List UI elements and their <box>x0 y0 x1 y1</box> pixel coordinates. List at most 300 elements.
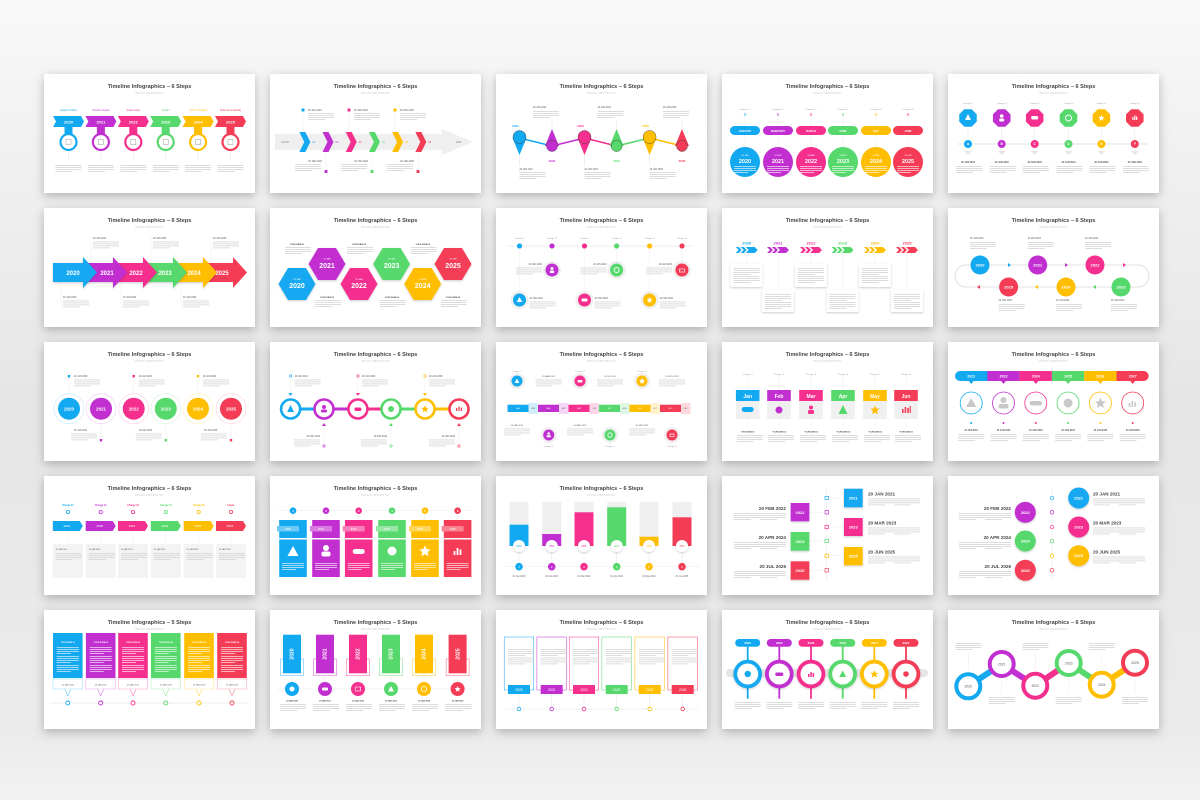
Jan: Change #1 <box>743 374 753 376</box>
step E: Change #5 <box>1097 103 1107 105</box>
slide 15: year bar with outlined circles: Timeline Infographics – 6 Steps <box>1012 352 1095 358</box>
bar 2023 <box>379 635 405 711</box>
date notes: 20 JAN 2021 <box>93 237 107 240</box>
April: 2023 <box>837 159 849 165</box>
chevron 05 <box>392 132 409 152</box>
node 2024 <box>1089 643 1115 697</box>
step 2023: 20 JAN 2022 <box>997 429 1011 432</box>
hex 2022: YOUR DATA 03 <box>352 243 367 246</box>
card 1: YOUR DATA 01 <box>61 641 76 644</box>
step 6: Change #6 <box>677 238 688 240</box>
chevron 06: 06 <box>428 140 432 144</box>
step B: B <box>1001 142 1004 146</box>
arrow 2020 <box>53 257 97 288</box>
hex 2021: 13 JAN <box>323 258 331 260</box>
step 2026: 2026 <box>1096 374 1104 378</box>
node 2025 <box>1122 651 1148 704</box>
hex 2023: 28 JAN <box>388 258 396 260</box>
circle 2021: 2021 <box>1033 263 1043 268</box>
slide 1: chevron years with circles: Timeline Infographics – 6 Steps <box>108 84 191 90</box>
bar 2020: 20 JAN 2020 <box>286 700 299 702</box>
node 2024: 2024 <box>1098 683 1106 687</box>
bar 2020: 2020 <box>290 648 296 660</box>
step F: F <box>1134 142 1136 146</box>
March <box>796 109 826 177</box>
Feb: Feb <box>775 394 783 400</box>
ring 6 <box>429 400 468 447</box>
slide 3: zigzag pins <box>496 74 707 193</box>
slide 12: ring chain with icons: Timeline Infographics – 6 Steps <box>334 352 417 358</box>
ring 2023 <box>797 639 825 709</box>
step 2027: 20 JAN 2026 <box>1126 429 1140 432</box>
ring 2023: 2023 <box>808 641 815 645</box>
arrow 2023 <box>144 257 187 288</box>
chevron 05: 05 <box>405 140 409 144</box>
slide 2: start/end arrow band <box>270 74 481 193</box>
connecting bars <box>291 408 459 410</box>
pin 2021: 2021 <box>512 124 519 128</box>
bar 2024: 20 JAN 2024 <box>418 700 431 702</box>
chevron 04: 04 <box>382 140 385 144</box>
month bar: NOV <box>668 408 673 410</box>
card 4: 20 JAN 2023 <box>160 683 173 686</box>
June: 2025 <box>902 159 914 165</box>
Apr: YOUR DATA 04 <box>836 430 851 434</box>
node 2022 <box>1022 643 1048 698</box>
month bar: SEP <box>638 408 643 410</box>
ring 5: 20 JAN 2025 <box>429 375 443 378</box>
bottom dates: 20 JAN 2022 <box>308 160 323 163</box>
step 2023: 2023 <box>194 524 201 528</box>
slide 14: month boxes with icons <box>722 342 933 461</box>
bottom dates: 20 JAN 2026 <box>400 160 415 163</box>
step 2021 <box>85 109 116 172</box>
bar 75% <box>672 502 692 578</box>
hex 2023: 2023 <box>384 263 399 270</box>
Feb: YOUR DATA 02 <box>772 430 786 434</box>
month bar: JUN <box>592 408 597 410</box>
Mar: Change #3 <box>806 374 817 376</box>
April <box>828 109 858 177</box>
entry 2026 <box>734 561 828 580</box>
step 2022 <box>958 374 984 441</box>
bar 2025: 20 JAN 2025 <box>452 700 464 702</box>
bar 25%: 2 <box>551 565 553 569</box>
step 3 <box>576 238 620 309</box>
step 2022 <box>795 240 827 287</box>
circle 2022: 2022 <box>129 406 139 412</box>
step 2020: 2020 <box>96 524 103 528</box>
May: May <box>870 394 880 400</box>
slide 17: numbered colored columns with icons: Enter your subhead line here <box>361 494 390 496</box>
slide 21: colored cards with date callouts: Enter your subhead line here <box>135 628 164 630</box>
May: MAY <box>873 129 879 133</box>
slide 13: monthly bar <box>496 342 707 461</box>
circle 2022: 20 JAN 2022 <box>1085 237 1099 240</box>
gray band arrow <box>275 129 473 155</box>
month bar: MAR <box>546 407 551 410</box>
slide 5: octagons with letters: Timeline Infographics – 6 Steps <box>1012 84 1095 90</box>
pin 2023 <box>577 124 610 179</box>
step 2021: Prioritize Criteria <box>92 109 110 112</box>
circle 2024: 20 JAN 2024 <box>1056 299 1070 302</box>
March: 20 MAR <box>807 154 815 157</box>
entry 2024: 20 APR 2024 <box>759 535 786 540</box>
step 5: 20 JAN 2025 <box>660 297 674 300</box>
arrows <box>977 263 1126 289</box>
chevron 02 <box>322 132 339 152</box>
node 2021: 2021 <box>998 662 1006 666</box>
step 2022: 20 JAN 2022 <box>154 548 166 551</box>
slide 7: hexagons <box>270 208 481 327</box>
bar 20%: 20% <box>646 544 652 548</box>
ring 2024 c <box>892 639 920 709</box>
box 2024 <box>635 637 665 711</box>
step B: 20 JAN 2022 <box>995 161 1009 164</box>
step 2021: 2021 <box>96 119 106 124</box>
ring 2024 b: 2024 <box>871 641 878 645</box>
step 2022: 20 JAN 2021 <box>964 429 979 432</box>
node 2022: 2022 <box>1032 684 1039 688</box>
box 2020 <box>504 637 534 711</box>
bar 50% <box>510 502 528 578</box>
bottom markers: Change #4 <box>605 446 615 448</box>
slide 11: circles with rings <box>44 342 255 461</box>
Mar: Mar <box>807 394 815 400</box>
step 2022: 2022 <box>807 240 816 246</box>
top dates <box>302 108 426 132</box>
circle 2023: 2023 <box>161 406 171 412</box>
January: 20 JAN <box>742 154 749 157</box>
pin 2023: 20 JAN 2023 <box>584 168 599 171</box>
entry 2022 <box>734 503 828 521</box>
date notes: 20 JAN 2023 <box>153 237 167 240</box>
slide 11: circles with rings: Enter your subhead line here <box>135 360 164 362</box>
Mar: YOUR DATA 03 <box>804 430 818 434</box>
June: 20 JUN <box>905 155 912 157</box>
step 2020: Change #2 <box>95 505 107 507</box>
slide 18: percentage bar chart: Enter your subhead line here <box>587 494 616 496</box>
ring 6: 20 JAN 2024 <box>442 435 456 438</box>
hex 2024: 20 JAN <box>419 278 427 281</box>
month bar: JAN <box>516 407 520 410</box>
step D: D <box>1067 142 1070 146</box>
step 1: Change #1 <box>515 238 525 240</box>
step A: 20 JAN 2021 <box>961 161 976 164</box>
chevron 04 <box>369 132 385 152</box>
May: YOUR DATA 05 <box>868 430 882 434</box>
Apr: Apr <box>839 394 847 400</box>
Jun <box>894 374 921 442</box>
card 5: 20 JAN 2024 <box>193 683 206 686</box>
pin 2026: 20 JAN 2026 <box>663 106 677 109</box>
entry 2024 <box>734 532 828 551</box>
slide 16: arrow tabs with gray boxes: Enter your subhead line here <box>135 494 164 496</box>
step 2023: 20 JAN 2023 <box>187 548 199 551</box>
step 2026 <box>1087 374 1113 441</box>
top markers: 20 JAN 2021 <box>511 424 524 427</box>
step 2025: 2025 <box>226 119 236 124</box>
step 2023 <box>990 374 1016 441</box>
slide 19: vertical timeline with squares <box>722 476 933 595</box>
bottom markers <box>536 375 685 448</box>
circle 2020 <box>970 237 996 274</box>
card 3 <box>118 633 148 705</box>
hex 2025: 2025 <box>445 263 461 270</box>
top markers <box>504 371 655 435</box>
slide 22: vertical year bars with icons: Enter your subhead line here <box>361 628 390 630</box>
step 2023: Factors <box>162 109 170 112</box>
step 2: 20 JAN 2020 <box>529 263 543 266</box>
circle 2024 <box>183 375 229 424</box>
bar 90%: 4 <box>616 565 618 569</box>
arrow 2024 <box>174 257 217 288</box>
bar 25% <box>542 502 561 578</box>
June: JUNE <box>905 129 912 133</box>
slide 14: month boxes with icons: Enter your subhead line here <box>813 360 842 362</box>
entry 2022: 20 FEB 2022 <box>759 506 786 511</box>
ring 1 <box>281 375 321 418</box>
slide 16: arrow tabs with gray boxes: Timeline Infographics – 6 Steps <box>108 486 191 492</box>
step 2024 <box>216 504 246 578</box>
March: 2022 <box>805 159 817 165</box>
slide 16: arrow tabs with gray boxes <box>44 476 255 595</box>
step F: Change #6 <box>1130 103 1141 105</box>
slide 10: loop track with circles: Timeline Infographics – 6 Steps <box>1012 218 1095 224</box>
step 2020 <box>86 505 116 578</box>
entry 2022 <box>959 502 1054 523</box>
step 2021: 2021 <box>129 524 136 528</box>
connectors <box>968 663 1135 686</box>
hex 2025 <box>434 248 472 307</box>
bottom markers: Change #6 <box>667 446 677 448</box>
slide 1: chevron years with circles: Enter your subhead line here <box>135 92 164 94</box>
bar 50%: 1 <box>518 565 520 569</box>
entry 2024 <box>959 530 1054 552</box>
column 4: 4 <box>391 509 393 513</box>
step 2022 <box>151 504 181 578</box>
January: JANUARY <box>739 129 751 133</box>
circle 2024 <box>1056 278 1082 311</box>
step 2020 <box>730 240 762 287</box>
pin 2025: 20 JAN 2025 <box>650 168 664 171</box>
node 2020: 2020 <box>965 685 972 689</box>
step 2024: 20 JAN 2023 <box>1029 429 1043 432</box>
step C: 20 JAN 2023 <box>1028 161 1042 164</box>
hex 2023: YOUR DATA 04 <box>384 296 400 299</box>
step 2025: 2025 <box>1064 374 1072 378</box>
step 2024: S.W.O.T Analysis <box>189 109 208 112</box>
bar 2020 <box>280 635 306 711</box>
bar 2025 <box>446 635 472 711</box>
June: Change #6 <box>903 109 914 111</box>
May: Change #5 <box>871 109 882 111</box>
date notes: 20 JAN 2025 <box>213 237 227 240</box>
month bar: APR <box>562 407 566 410</box>
card 2: YOUR DATA 02 <box>94 641 109 644</box>
step 5: Change #5 <box>645 238 655 240</box>
entry 2026: 2026 <box>1021 568 1031 573</box>
step 2021 <box>762 240 794 312</box>
entry 2025 <box>1050 545 1145 566</box>
bar 2022: 2022 <box>356 648 362 660</box>
bar 90% <box>607 502 626 578</box>
May: 2024 <box>870 159 883 165</box>
bottom dates: 20 JAN 2024 <box>354 160 369 163</box>
date notes: 20 JAN 2024 <box>183 296 197 299</box>
February: Change #2 <box>773 109 784 111</box>
step 1: 20 JAN 2021 <box>530 297 544 300</box>
entry 2024: 2024 <box>1021 538 1031 544</box>
step 2025 <box>891 240 923 312</box>
slide 24: pills with big rings on band <box>722 610 933 729</box>
column 2 <box>310 507 340 577</box>
step 2019: Change #1 <box>62 505 74 507</box>
circle 2024: 20 JAN 2024 <box>203 375 217 378</box>
ring 3 <box>348 375 388 418</box>
pin 2026: 2026 <box>679 159 686 163</box>
slide 13: monthly bar: Enter your subhead line here <box>587 360 616 362</box>
chevron 06 <box>415 132 432 152</box>
step 2023 <box>150 109 181 172</box>
ring 4 <box>361 400 400 447</box>
bar 80%: 80% <box>581 544 587 548</box>
bar 2022: 20 JAN 2022 <box>352 700 365 702</box>
circle 2021: 20 JAN 2021 <box>74 429 88 432</box>
circle 2020: 20 JAN 2020 <box>74 375 88 378</box>
slide 4: month pills and big circles: Timeline Infographics – 6 Steps <box>786 84 869 90</box>
March: Change #3 <box>806 109 817 111</box>
step 2025 <box>1055 374 1081 441</box>
card 1 <box>53 633 83 705</box>
slide 22: vertical year bars with icons: Timeline Infographics – 5 Steps <box>334 620 417 626</box>
step 4: 20 JAN 2022 <box>593 263 607 266</box>
entry 2023: 20 MAR 2023 <box>1093 520 1122 526</box>
bar 25%: 01 Feb 2021 <box>545 576 559 578</box>
circle 2023 <box>136 394 181 441</box>
hex 2025: 13 JAN <box>449 258 457 260</box>
step 2023: 2023 <box>838 240 848 246</box>
bar 90%: 90% <box>614 544 620 548</box>
step D: Change #4 <box>1064 103 1074 105</box>
step 2025: 20 JAN 2024 <box>1061 429 1076 432</box>
Jan <box>736 374 763 442</box>
entry 2021: 20 JAN 2021 <box>868 492 896 496</box>
entry 2026: 2026 <box>796 568 805 573</box>
Jan: Jan <box>743 394 752 400</box>
pin 2024: 20 JAN 2024 <box>598 106 612 109</box>
column 5 <box>409 507 439 577</box>
April: 20 APR <box>840 154 847 157</box>
bar 75%: 75% <box>679 544 685 548</box>
slide 15: year bar with outlined circles: Enter your subhead line here <box>1039 360 1068 362</box>
box 2025: 2025 <box>679 688 687 692</box>
step 2020 <box>53 109 84 172</box>
card 6: YOUR DATA 06 <box>225 641 240 644</box>
step 2024 <box>183 109 214 172</box>
step C: C <box>1034 142 1037 146</box>
column 6: 2025 <box>449 527 456 531</box>
column 5: 2024 <box>417 527 424 531</box>
month bar: AUG <box>623 407 627 410</box>
circle 2023: 20 JAN 2023 <box>1111 299 1125 302</box>
Feb <box>767 374 794 442</box>
card 6 <box>217 633 247 705</box>
entry 2026 <box>959 560 1054 581</box>
slide 9: chevron years with note cards <box>722 208 933 327</box>
slide 9: chevron years with note cards: Enter your subhead line here <box>813 226 842 228</box>
ring 3: 20 JAN 2023 <box>362 375 376 378</box>
entry 2022: 2022 <box>1021 510 1031 515</box>
pin 2024 <box>598 106 624 163</box>
slide 4: month pills and big circles <box>722 74 933 193</box>
circle 2025: 20 JAN 2025 <box>204 429 218 432</box>
step E: 20 JAN 2025 <box>1094 161 1109 164</box>
month bar: FEB <box>531 408 536 410</box>
Mar <box>799 374 826 442</box>
slide 20: vertical timeline with circles <box>948 476 1159 595</box>
card 3: YOUR DATA 03 <box>126 641 141 644</box>
slide 5: octagons with letters <box>948 74 1159 193</box>
entry 2025: 20 JUN 2025 <box>868 550 896 554</box>
column 4 <box>376 507 406 577</box>
slide 14: month boxes with icons: Timeline Infographics – 6 Steps <box>786 352 869 358</box>
box 2023: 2023 <box>613 688 621 692</box>
ring 5 <box>416 375 455 418</box>
circle 2022: 20 JAN 2022 <box>139 375 153 378</box>
bar 2022 <box>346 635 372 711</box>
node 2023 <box>1056 651 1082 704</box>
slide 17: numbered colored columns with icons: Timeline Infographics – 6 Steps <box>334 486 417 492</box>
April: Change #4 <box>838 109 849 111</box>
hex 2020 <box>278 243 316 300</box>
arrow 2021 <box>84 257 127 288</box>
bar 20% <box>640 502 658 578</box>
step 3: 20 JAN 2023 <box>594 297 609 300</box>
bottom markers: 20 MAR 2021 <box>542 375 556 378</box>
top markers: Change #5 <box>637 371 647 373</box>
entry 2021 <box>825 489 920 507</box>
date notes: 20 JAN 2020 <box>63 296 77 299</box>
step 2 <box>516 238 561 279</box>
pin 2022: 20 JAN 2022 <box>533 106 547 109</box>
slide 10: loop track with circles <box>948 208 1159 327</box>
date notes: 20 JAN 2022 <box>123 296 137 299</box>
column 6: 6 <box>457 509 459 513</box>
bar 20%: 5 <box>648 565 650 569</box>
step 2: Change #2 <box>547 238 558 240</box>
February: FEBRUARY <box>771 129 785 133</box>
column 4: 2023 <box>384 527 391 531</box>
step 2024: 2024 <box>227 524 234 528</box>
slide 6: big overlapping arrows <box>44 208 255 327</box>
circle 2021: 20 JAN 2021 <box>1028 237 1042 240</box>
step 2020: 2020 <box>64 119 74 124</box>
bar 2023: 2023 <box>389 648 395 660</box>
arrow 2022: 2022 <box>129 271 143 277</box>
step 2023 <box>827 240 859 312</box>
hex 2025: YOUR DATA 06 <box>446 296 461 299</box>
entry 2026: 20 JUL 2026 <box>760 564 786 569</box>
box 2021: 2021 <box>548 688 556 692</box>
pin 2024: 2024 <box>613 159 620 163</box>
step 2024: 2024 <box>1032 374 1040 378</box>
entry 2023 <box>825 518 920 536</box>
slide 15: year bar with outlined circles <box>948 342 1159 461</box>
card 1: 20 JAN 2020 <box>62 683 75 686</box>
slide 6: big overlapping arrows: Enter your subhead line here <box>135 226 164 228</box>
pin 2021: 20 JAN 2021 <box>520 168 534 171</box>
